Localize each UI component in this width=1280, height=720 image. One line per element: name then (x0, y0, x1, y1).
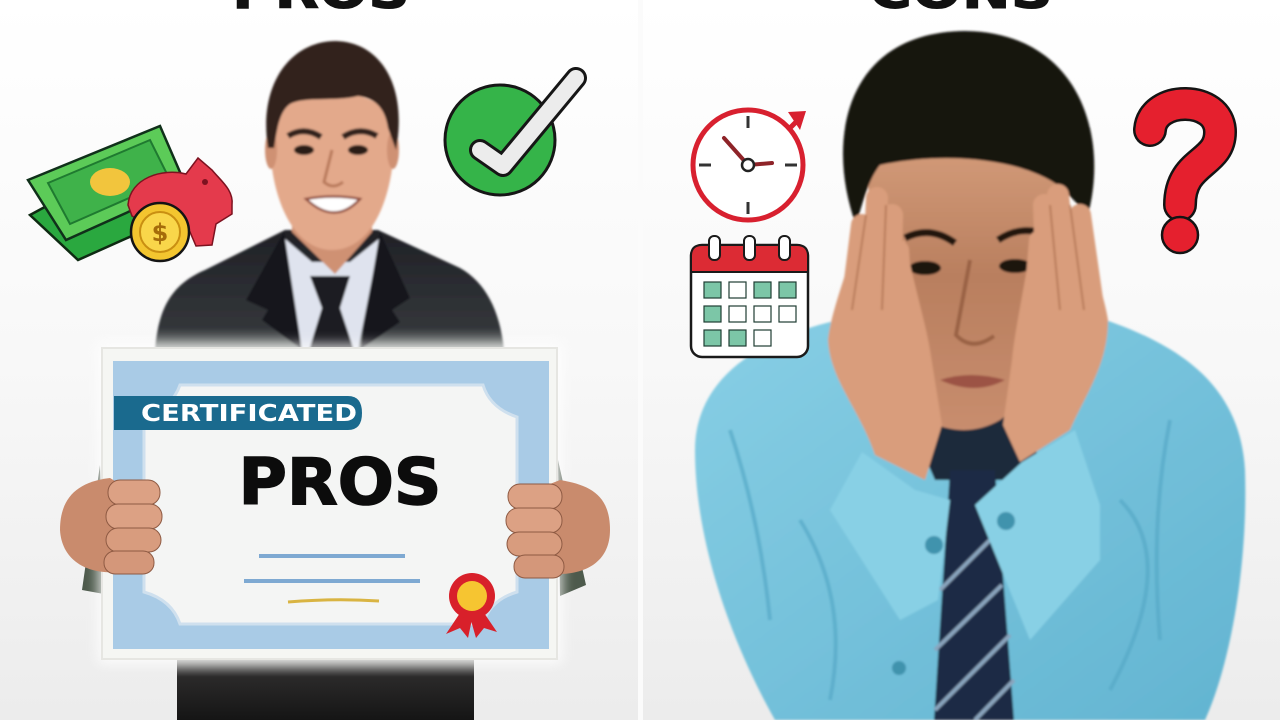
ribbon seal (446, 573, 497, 638)
sleeve folds (730, 420, 1170, 700)
certificate blue border (113, 361, 549, 649)
piggy (128, 158, 232, 246)
brows (905, 231, 1046, 243)
nose (324, 150, 343, 186)
nose (956, 260, 994, 344)
hair (266, 41, 399, 150)
certificate lines (244, 554, 420, 583)
eyes (909, 259, 1031, 275)
fingers (852, 205, 1084, 310)
cuff right (975, 430, 1100, 640)
certificate (98, 344, 562, 664)
lower trousers (177, 658, 474, 720)
panel: pros background (0, 0, 638, 720)
buttons (892, 512, 1015, 675)
shirt collar (284, 238, 380, 350)
tie (309, 276, 354, 350)
banner: certificated: CERTIFICATED (141, 401, 357, 427)
icon: money and piggy bank (28, 126, 232, 261)
coin (131, 203, 189, 261)
banner: certificated (114, 396, 362, 430)
icon: money and piggy bank: $ (152, 219, 168, 247)
smile (306, 196, 360, 212)
collar and neck (900, 400, 1040, 480)
mouth (940, 375, 1005, 388)
suit torso (155, 230, 504, 352)
panel divider (638, 0, 643, 720)
face (868, 150, 1060, 430)
icon: question mark (1150, 104, 1220, 253)
icon: green check mark (445, 78, 576, 195)
hand right (506, 480, 610, 578)
icon: clock (693, 110, 806, 220)
hand left (60, 478, 162, 574)
hair (843, 31, 1094, 225)
certificate title: PROS (238, 446, 442, 520)
shirt body (695, 318, 1245, 720)
signature (288, 600, 379, 602)
brows (288, 131, 377, 137)
hand right (1003, 195, 1108, 462)
figure: stressed businessman (695, 31, 1245, 720)
face (270, 92, 394, 250)
lapel right (360, 232, 410, 350)
icon: calendar (691, 236, 808, 357)
panel: cons background (643, 0, 1280, 720)
eyes (294, 145, 314, 155)
neck (292, 190, 372, 274)
ear right (387, 131, 399, 169)
certificate inner panel (144, 385, 517, 624)
figure: smiling businessman (155, 41, 504, 352)
tie (934, 470, 1014, 720)
ear left (265, 131, 277, 169)
sleeves behind certificate (82, 460, 586, 596)
hand left (828, 198, 942, 480)
lapel left (246, 232, 302, 350)
cuff left (830, 452, 950, 620)
